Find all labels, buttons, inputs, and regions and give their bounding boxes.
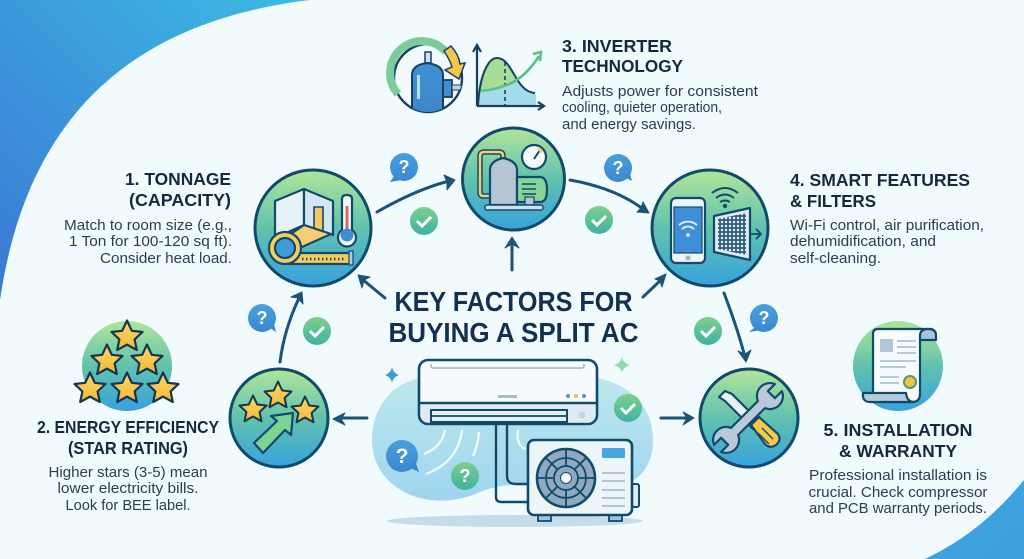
text block: 1 tonnage: 1. TONNAGE: [125, 169, 231, 189]
node: star rating circle: [230, 369, 328, 467]
text block: 4 smart features: self-cleaning.: [790, 251, 881, 267]
icon: green sparkle: [614, 357, 630, 373]
icon: check left: [303, 317, 331, 345]
node: compressor circle: [462, 128, 564, 230]
node: smart features circle: [652, 170, 768, 286]
text block: 1 tonnage: 1 Ton for 100-120 sq ft).: [69, 234, 232, 250]
arrow: AC to tools: [661, 412, 694, 425]
air conditioner illustration: [372, 360, 653, 527]
text block: 4 smart features: & FILTERS: [790, 191, 876, 211]
icon: check right: [694, 317, 722, 345]
text block: 3 inverter technology: [562, 36, 758, 133]
text block: 3 inverter technology: Adjusts power for consistent: [562, 84, 758, 100]
text block: 5 installation: 5. INSTALLATION: [824, 420, 972, 440]
arrow: tonnage to compressor: [377, 175, 455, 212]
icon: question bubble top left: ?: [398, 157, 410, 177]
text block: 4 smart features: Wi-Fi control, air purification,: [790, 218, 984, 234]
icon: question bubble right: ?: [758, 308, 770, 328]
icon: question bubble top right: [604, 154, 632, 182]
text block: 5 installation: crucial. Check compressor: [808, 485, 988, 501]
node: tools circle: [700, 369, 798, 467]
text block: 3 inverter technology: and energy savings.: [562, 117, 696, 133]
title: [388, 286, 638, 348]
icon: six stars: [74, 320, 178, 411]
text block: 2 energy efficiency: Higher stars (3-5) mean: [48, 465, 208, 481]
icon: question bubble top left: [390, 153, 418, 182]
icon: green question on AC: [451, 462, 479, 490]
corner: bottom-right blue swoosh: [925, 480, 1024, 559]
icon: warranty certificate: [853, 321, 943, 411]
text block: 3 inverter technology: TECHNOLOGY: [562, 56, 683, 76]
text block: 2 energy efficiency: Look for BEE label.: [66, 498, 190, 514]
title: KEY FACTORS FOR: [394, 286, 632, 317]
text block: 5 installation: [808, 420, 988, 517]
text block: 2 energy efficiency: lower electricity bills.: [58, 481, 198, 497]
arrow: compressor to smart features: [570, 180, 649, 213]
icon: check top left: [410, 207, 438, 235]
text block: 5 installation: and PCB warranty periods.: [809, 501, 987, 517]
text block: 4 smart features: 4. SMART FEATURES: [790, 170, 970, 190]
icon: question bubble on AC: [386, 440, 419, 472]
arrow: AC to stars: [333, 413, 367, 425]
text block: 2 energy efficiency: 2. ENERGY EFFICIENCY: [37, 417, 219, 437]
icon: question bubble left: ?: [256, 308, 268, 328]
text block: 2 energy efficiency: [37, 417, 219, 514]
corner: top-left blue swoosh: [0, 0, 310, 300]
icon: question bubble on AC: ?: [396, 445, 408, 468]
text block: 1 tonnage: Consider heat load.: [100, 251, 232, 267]
text block: 2 energy efficiency: (STAR RATING): [68, 438, 188, 458]
text block: 1 tonnage: Match to room size (e.g.,: [64, 218, 232, 234]
arrow: title to smart features: [643, 274, 666, 297]
icon: check on AC: [614, 394, 642, 422]
arrow: smart features to tools: [724, 293, 751, 362]
arrow: stars to tonnage: [280, 292, 303, 362]
text block: 3 inverter technology: cooling, quieter operation,: [562, 100, 722, 116]
arrow: title to tonnage: [358, 275, 385, 298]
text block: 4 smart features: [790, 170, 984, 267]
text block: 3 inverter technology: 3. INVERTER: [562, 36, 672, 56]
icon: green question on AC: ?: [460, 466, 470, 486]
text block: 5 installation: Professional installation is: [809, 468, 987, 484]
icon: question bubble left: [248, 304, 276, 332]
icon: question bubble right: [749, 304, 778, 332]
text block: 1 tonnage: (CAPACITY): [129, 190, 231, 210]
icon: inverter compressor and curve: [390, 41, 544, 115]
title: BUYING A SPLIT AC: [388, 317, 638, 348]
text block: 4 smart features: dehumidification, and: [790, 234, 936, 250]
node: tonnage circle: [255, 170, 371, 286]
text block: 1 tonnage: [64, 169, 232, 267]
icon: check top right: [585, 206, 613, 234]
arrow: title to compressor: [505, 237, 519, 270]
text block: 5 installation: & WARRANTY: [839, 441, 957, 461]
icon: question bubble top right: ?: [612, 158, 624, 178]
icon: blue sparkle: [385, 367, 399, 383]
